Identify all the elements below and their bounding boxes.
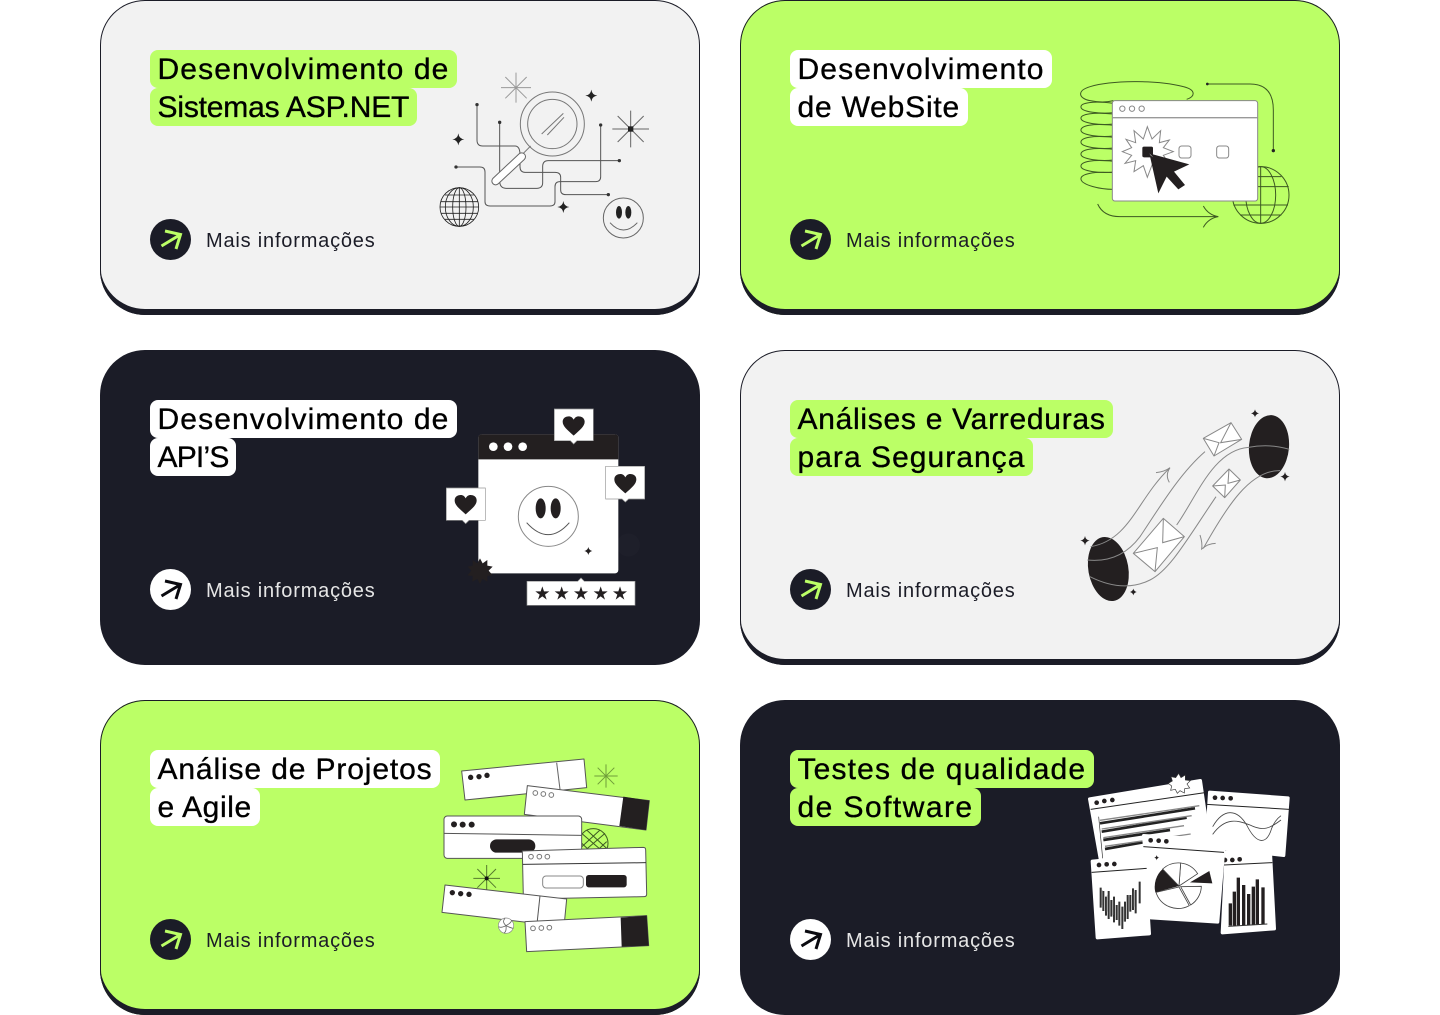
illustration: browser window with cursor	[1080, 81, 1290, 228]
link: mais informações	[150, 219, 376, 260]
illustration: magnifier and circuit	[440, 72, 649, 238]
panel: Testes de qualidade de Software	[740, 700, 1340, 1015]
heading line 1: Desenvolvimento de	[158, 53, 449, 86]
heading line 1: Desenvolvimento de	[158, 403, 449, 436]
panel: Desenvolvimento de WebSite	[740, 0, 1340, 315]
link: mais informações: Mais informações	[206, 930, 376, 952]
illustration: chart windows	[1088, 773, 1290, 940]
link: mais informações	[790, 919, 1016, 960]
link: mais informações: Mais informações	[206, 230, 376, 252]
panel: Desenvolvimento de API'S	[100, 350, 700, 665]
link: mais informações	[790, 219, 1016, 260]
heading line 2: e Agile	[158, 791, 252, 824]
heading line 2: Sistemas ASP.NET	[158, 91, 409, 124]
heading line 1: Desenvolvimento	[798, 53, 1045, 86]
heading line 2: para Segurança	[798, 441, 1025, 474]
heading line 2: de Software	[798, 791, 974, 824]
link: mais informações	[150, 569, 376, 610]
link: mais informações: Mais informações	[846, 230, 1016, 252]
illustration: envelopes between portals	[1080, 410, 1290, 601]
link: mais informações: Mais informações	[846, 930, 1016, 952]
heading line 2: de WebSite	[798, 91, 960, 124]
link: mais informações: Mais informações	[206, 580, 376, 602]
panel: Desenvolvimento de Sistemas ASP.NET	[100, 0, 700, 315]
link: mais informações: Mais informações	[846, 580, 1016, 602]
heading line 1: Análise de Projetos	[158, 753, 433, 786]
heading line 2: API’S	[158, 441, 229, 474]
heading line 1: Testes de qualidade	[798, 753, 1086, 786]
illustration: window with hearts and rating	[446, 408, 645, 606]
panel: Análises e Varreduras para Segurança	[740, 350, 1340, 665]
link: mais informações	[790, 569, 1016, 610]
panel: Análise de Projetos e Agile	[100, 700, 700, 1015]
link: mais informações	[150, 919, 376, 960]
heading line 1: Análises e Varreduras	[798, 403, 1106, 436]
illustration: stacked windows	[442, 758, 650, 952]
